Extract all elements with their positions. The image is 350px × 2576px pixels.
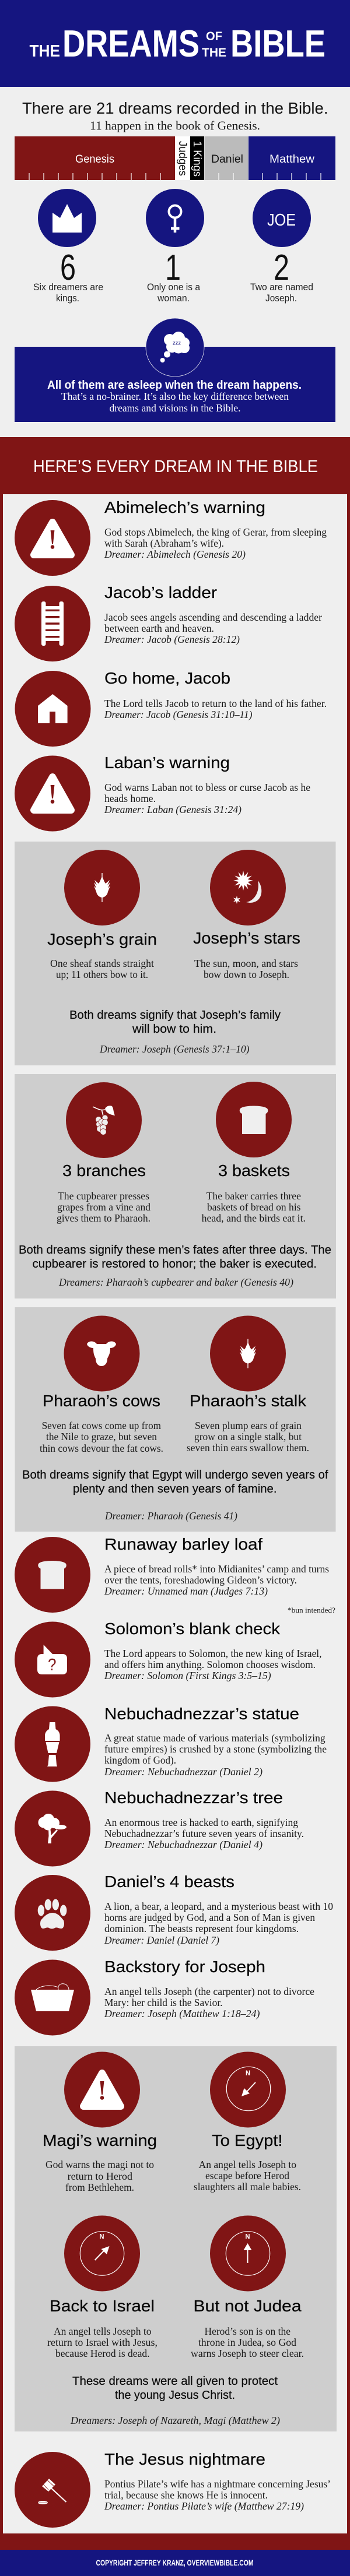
- panel: protecting young Jesus: the young Jesus Christ.: [115, 2389, 235, 2402]
- dream: Nebuchadnezzar's tree: [15, 1789, 304, 1866]
- dream: Backstory for Joseph: [15, 1958, 314, 2035]
- dream: 3 branches: [57, 1082, 150, 1224]
- stat: woman: woman.: [157, 293, 190, 304]
- dream: To Egypt!: [194, 2051, 301, 2193]
- dream: Back to Israel: An angel tells Joseph to: [54, 2325, 152, 2337]
- title banner: THE: [202, 46, 226, 59]
- callout: asleep: All of them are asleep when the dream happens.: [47, 379, 302, 392]
- icon: question speech bubble: [37, 1645, 67, 1674]
- dream: Go home, Jacob: The Lord tells Jacob to return to the land of his father.: [104, 698, 327, 709]
- icon: warning triangle: [34, 777, 71, 810]
- dream: The Jesus nightmare: Pontius Pilate’s wife has a nightmare concerning Jesus’: [104, 2478, 331, 2490]
- dream: Pharaoh's cows: thin cows devour the fat cows.: [40, 1442, 163, 1454]
- dream: But not Judea: throne in Judea, so God: [198, 2336, 296, 2348]
- dream: Nebuchadnezzar's statue: future empires) is crushed by a stone (symbolizing the: [104, 1743, 327, 1755]
- icon: thought cloud: [160, 332, 190, 363]
- dream: 3 baskets: The baker carries three: [206, 1190, 301, 1202]
- dream: Pharaoh's cows: Pharaoh’s cows: [43, 1392, 160, 1410]
- panel: protecting young Jesus: Dreamers: Joseph of Nazareth, Magi (Matthew 2): [70, 2415, 280, 2427]
- red section frame and heading: HERE’S EVERY DREAM IN THE BIBLE: [33, 457, 318, 476]
- intro heading: [22, 99, 328, 133]
- panel: protecting young Jesus: [15, 2046, 337, 2431]
- icon: compass north: N: [245, 2232, 250, 2240]
- dream: Backstory for Joseph: Dreamer: Joseph (Matthew 1:18–24): [104, 2008, 260, 2020]
- icon: compass northeast: N: [99, 2232, 104, 2240]
- dream: Pharaoh's cows: Seven fat cows come up from: [42, 1420, 161, 1431]
- dream: 3 branches: grapes from a vine and: [57, 1201, 150, 1213]
- dream: Abimelech's warning: Dreamer: Abimelech (Genesis 20): [104, 548, 246, 561]
- dream: 3 branches: gives them to Pharaoh.: [57, 1212, 150, 1224]
- panel: Joseph's dreams: Dreamer: Joseph (Genesis 37:1–10): [99, 1043, 249, 1055]
- title banner: OF: [206, 30, 222, 43]
- dream: Nebuchadnezzar's statue: A great statue made of various materials (symbolizing: [104, 1732, 326, 1744]
- dream: But not Judea: [191, 2216, 304, 2359]
- icon: thought cloud: zzz: [173, 340, 181, 346]
- dream: Abimelech's warning: [15, 498, 327, 576]
- dream: Solomon's blank check: and offers him anything. Solomon chooses wisdom.: [104, 1659, 316, 1670]
- dream: Runaway barley loaf: A piece of bread rolls* into Midianites’ camp and turns: [104, 1563, 329, 1575]
- dream: Nebuchadnezzar's tree: Nebuchadnezzar’s tree: [104, 1789, 283, 1807]
- dream: Go home, Jacob: Go home, Jacob: [104, 669, 230, 687]
- dream: Daniel's 4 beasts: [15, 1873, 333, 1951]
- panel: cupbearer and baker: cupbearer is restored to honor; the baker is executed.: [33, 1258, 317, 1271]
- callout: asleep: That’s a no-brainer. It’s also the key difference between: [61, 390, 289, 402]
- dream: Magi's warning: God warns the magi not to: [46, 2159, 154, 2170]
- dream: Jacob's ladder: between earth and heaven.: [104, 622, 214, 634]
- dream: The Jesus nightmare: The Jesus nightmare: [104, 2450, 265, 2468]
- dream: Joseph's grain: up; 11 others bow to it.: [56, 969, 148, 980]
- dream: Magi's warning: return to Herod: [68, 2170, 132, 2182]
- dream: Pharaoh's cows: the Nile to graze, but seven: [46, 1431, 157, 1442]
- dream: Magi's warning: Magi’s warning: [43, 2131, 157, 2149]
- dream: Pharaoh's stalk: Pharaoh’s stalk: [190, 1392, 307, 1410]
- intro heading: There are 21 dreams recorded in the Bible.: [22, 99, 328, 117]
- dream: Joseph's stars: [193, 850, 300, 980]
- dream: Runaway barley loaf: *bun intended?: [288, 1606, 335, 1614]
- dream: To Egypt!: slaughters all male babies.: [194, 2181, 301, 2193]
- panel: Pharaoh's dreams: Dreamer: Pharaoh (Genesis 41): [104, 1510, 237, 1522]
- dream: 3 baskets: head, and the birds eat it.: [202, 1212, 306, 1224]
- stat: woman: Only one is a: [147, 281, 200, 293]
- dream: Solomon's blank check: Solomon’s blank check: [104, 1620, 281, 1638]
- panel: cupbearer and baker: [15, 1074, 336, 1298]
- stat: Joseph: JOE: [267, 211, 296, 230]
- stat: Joseph: [250, 189, 313, 304]
- dream: 3 baskets: [202, 1082, 306, 1224]
- footer: COPYRIGHT JEFFREY KRANZ, OVERVIEWBIBLE.COM: [96, 2558, 253, 2567]
- icon: question speech bubble: ?: [48, 1656, 56, 1674]
- dream: Joseph's grain: One sheaf stands straight: [50, 958, 154, 969]
- icon: paw print: [38, 1899, 66, 1929]
- dream: Laban's warning: God warns Laban not to bless or curse Jacob as he: [104, 782, 310, 793]
- dream: Magi's warning: [43, 2051, 157, 2193]
- icon: basket with baby: [31, 1984, 74, 2011]
- icon: house: [38, 694, 68, 723]
- dream: Abimelech's warning: God stops Abimelech, the king of Gerar, from sleeping: [104, 526, 327, 538]
- dream: Abimelech's warning: Abimelech’s warning: [104, 498, 265, 516]
- dream: 3 baskets: 3 baskets: [218, 1162, 290, 1180]
- icon: compass northeast: [80, 2232, 124, 2275]
- dream: To Egypt!: escape before Herod: [205, 2170, 289, 2181]
- dream: Back to Israel: return to Israel with Jesus,: [47, 2336, 158, 2348]
- panel: cupbearer and baker: Dreamers: Pharaoh’s cupbearer and baker (Genesis 40): [58, 1276, 293, 1289]
- dream: Pharaoh's stalk: Seven plump ears of grain: [195, 1420, 302, 1431]
- dream: Laban's warning: Dreamer: Laban (Genesis 31:24): [104, 804, 242, 816]
- dream: Nebuchadnezzar's statue: [15, 1705, 327, 1782]
- dream: Daniel's 4 beasts: Dreamer: Daniel (Daniel 7): [104, 1934, 219, 1947]
- dream: Runaway barley loaf: Dreamer: Unnamed man (Judges 7:13): [104, 1585, 268, 1597]
- title banner: [0, 0, 350, 87]
- dream: Jacob's ladder: [15, 583, 322, 661]
- panel: cupbearer and baker: Both dreams signify these men’s fates after three days. The: [19, 1244, 331, 1257]
- dream: Magi's warning: from Bethlehem.: [65, 2181, 134, 2193]
- stat: Joseph: Joseph.: [265, 293, 297, 304]
- book distribution bar chart: Genesis: [75, 153, 114, 166]
- dream: The Jesus nightmare: Dreamer: Pontius Pilate’s wife (Matthew 27:19): [104, 2500, 304, 2512]
- stat: kings: 6: [60, 248, 76, 288]
- panel: Pharaoh's dreams: Both dreams signify that Egypt will undergo seven years of: [22, 1469, 328, 1481]
- dream: 3 branches: 3 branches: [62, 1162, 146, 1180]
- dream: Joseph's grain: [47, 850, 157, 980]
- dream: Laban's warning: [15, 754, 310, 831]
- book distribution bar chart: 1 Kings: [191, 141, 203, 177]
- stat: woman: [146, 189, 204, 304]
- dream: To Egypt!: To Egypt!: [212, 2131, 282, 2149]
- icon: compass southwest: [226, 2067, 271, 2111]
- dream: 3 baskets: baskets of bread on his: [207, 1201, 301, 1213]
- icon: tree: [38, 1814, 66, 1843]
- dream: Daniel's 4 beasts: dominion. The beasts represent four kingdoms.: [104, 1923, 299, 1934]
- dream: Laban's warning: Laban’s warning: [104, 754, 230, 772]
- dream: But not Judea: Herod’s son is on the: [204, 2325, 290, 2337]
- dream: Pharaoh's stalk: [187, 1316, 309, 1454]
- dream: Joseph's grain: Joseph’s grain: [47, 930, 157, 948]
- title banner: DREAMS: [62, 22, 200, 65]
- footer: [0, 2550, 350, 2576]
- icon: compass north: [226, 2232, 270, 2275]
- icon: ladder: [41, 601, 64, 646]
- book distribution bar chart: Matthew: [270, 153, 314, 166]
- dream: Nebuchadnezzar's tree: Nebuchadnezzar’s future seven years of insanity.: [104, 1828, 304, 1839]
- dream: Laban's warning: heads home.: [104, 793, 156, 804]
- dream: Abimelech's warning: with Sarah (Abraham’s wife).: [104, 537, 224, 550]
- panel: Joseph's dreams: [15, 842, 336, 1065]
- stat: kings: Six dreamers are: [33, 281, 103, 293]
- dream: Solomon's blank check: The Lord appears to Solomon, the new king of Israel,: [104, 1648, 322, 1659]
- dream: Solomon's blank check: [15, 1620, 322, 1697]
- stat: Joseph: Two are named: [250, 281, 313, 293]
- book distribution bar chart: Daniel: [211, 153, 243, 166]
- icon: warning triangle: [34, 522, 71, 555]
- stat: kings: kings.: [56, 293, 79, 304]
- dream: The Jesus nightmare: trial, because she knows He is innocent.: [104, 2489, 268, 2501]
- dream: Runaway barley loaf: Runaway barley loaf: [104, 1535, 262, 1553]
- dream: Pharaoh's stalk: grow on a single stalk, but: [194, 1431, 302, 1442]
- dream: Jacob's ladder: Jacob sees angels ascending and descending a ladder: [104, 611, 322, 623]
- callout: asleep: [15, 318, 335, 422]
- dream: To Egypt!: An angel tells Joseph to: [199, 2159, 296, 2170]
- dream: Go home, Jacob: Dreamer: Jacob (Genesis 31:10–11): [104, 709, 252, 721]
- dream: Back to Israel: because Herod is dead.: [55, 2348, 149, 2359]
- icon: bread: [38, 1561, 66, 1589]
- dream: Joseph's stars: bow down to Joseph.: [204, 969, 289, 980]
- dream: Backstory for Joseph: An angel tells Joseph (the carpenter) not to divorce: [104, 1986, 314, 1998]
- dream: The Jesus nightmare: [15, 2450, 331, 2528]
- book distribution bar chart: [15, 136, 335, 180]
- dream: Nebuchadnezzar's statue: Dreamer: Nebuchadnezzar (Daniel 2): [104, 1766, 262, 1778]
- book distribution bar chart: Judges: [176, 141, 188, 176]
- dream: Jacob's ladder: Dreamer: Jacob (Genesis 28:12): [104, 634, 240, 646]
- icon: gavel: [38, 2479, 66, 2504]
- panel: Joseph's dreams: will bow to him.: [132, 1023, 216, 1036]
- panel: protecting young Jesus: These dreams were all given to protect: [72, 2375, 278, 2388]
- intro heading: 11 happen in the book of Genesis.: [90, 119, 260, 133]
- dream: Back to Israel: [47, 2216, 158, 2359]
- dream: Backstory for Joseph: Mary: her child is the Savior.: [104, 1997, 223, 2008]
- dream: Solomon's blank check: Dreamer: Solomon (First Kings 3:5–15): [104, 1670, 271, 1682]
- dream: Nebuchadnezzar's statue: kingdom of God).: [104, 1754, 176, 1766]
- panel: Joseph's dreams: Both dreams signify that Joseph’s family: [69, 1009, 281, 1022]
- panel: Pharaoh's dreams: [15, 1307, 336, 1532]
- dream: Daniel's 4 beasts: horns are judged by God, and a Son of Man is given: [104, 1912, 315, 1923]
- dream: Daniel's 4 beasts: Daniel’s 4 beasts: [104, 1873, 235, 1891]
- dream: Backstory for Joseph: Backstory for Joseph: [104, 1958, 265, 1976]
- dream: Joseph's stars: The sun, moon, and stars: [194, 958, 298, 969]
- dream: Joseph's stars: Joseph’s stars: [193, 929, 300, 947]
- title banner: BIBLE: [230, 22, 326, 65]
- dream: Nebuchadnezzar's tree: Dreamer: Nebuchadnezzar (Daniel 4): [104, 1839, 262, 1851]
- dream: Jacob's ladder: Jacob’s ladder: [104, 583, 217, 601]
- stat: Joseph: 2: [274, 248, 289, 288]
- panel: Pharaoh's dreams: plenty and then seven years of famine.: [73, 1483, 276, 1495]
- dream: Runaway barley loaf: [15, 1535, 335, 1614]
- dream: Pharaoh's cows: [40, 1316, 163, 1454]
- dream: Pharaoh's stalk: seven thin ears swallow them.: [187, 1442, 309, 1454]
- dream: Daniel's 4 beasts: A lion, a bear, a leopard, and a mysterious beast with 10: [104, 1901, 333, 1912]
- dream: Runaway barley loaf: over the tents, foreshadowing Gideon’s victory.: [104, 1574, 297, 1586]
- callout: asleep: dreams and visions in the Bible.: [110, 402, 240, 414]
- dream: 3 branches: The cupbearer presses: [58, 1190, 149, 1202]
- dream: Back to Israel: Back to Israel: [50, 2297, 155, 2315]
- stat: kings: [33, 189, 103, 304]
- dream: Nebuchadnezzar's statue: Nebuchadnezzar’s statue: [104, 1705, 299, 1723]
- dream: But not Judea: But not Judea: [194, 2297, 302, 2315]
- stat: woman: 1: [165, 248, 181, 288]
- icon: statue: [45, 1722, 60, 1766]
- title banner: THE: [29, 42, 60, 61]
- dream: Go home, Jacob: [15, 669, 327, 747]
- dream: But not Judea: warns Joseph to steer clear.: [191, 2348, 304, 2359]
- icon: compass southwest: N: [246, 2069, 250, 2077]
- dream: Nebuchadnezzar's tree: An enormous tree is hacked to earth, signifying: [104, 1817, 298, 1828]
